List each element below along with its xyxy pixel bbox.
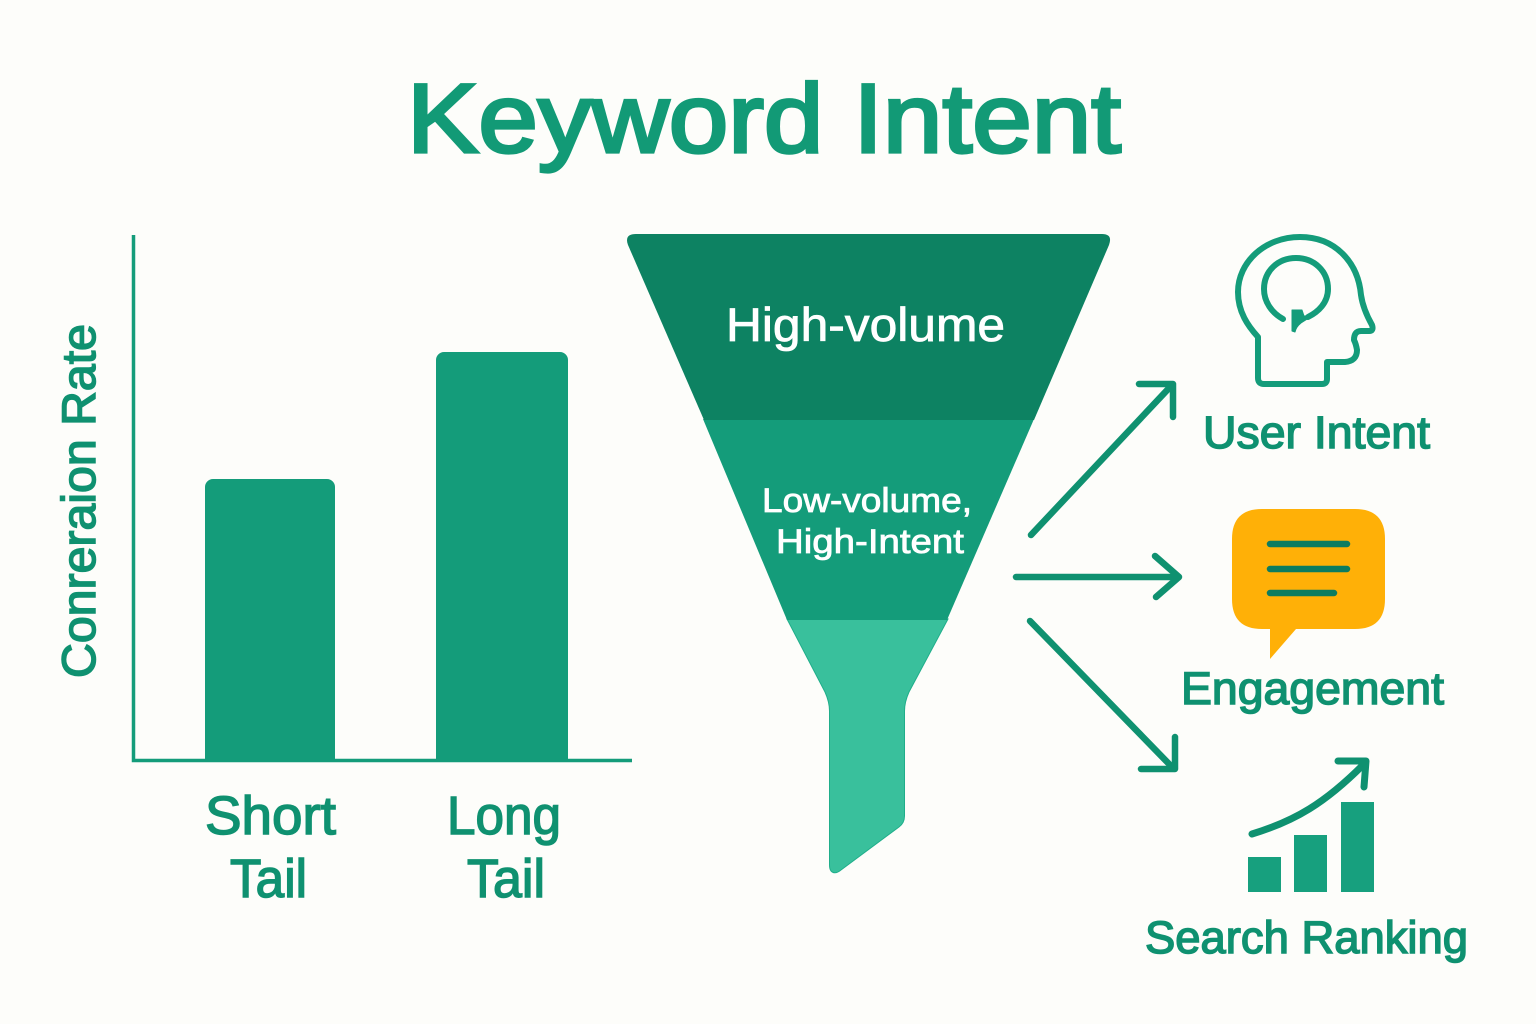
icon: head with circular arrow	[1238, 237, 1373, 384]
bar: short tail	[205, 479, 335, 759]
funnel spout	[787, 619, 948, 873]
label: long tail: Long	[447, 786, 561, 846]
label: low-volume: Low-volume,	[762, 482, 972, 520]
arrow: to user intent	[1031, 384, 1173, 535]
funnel top band	[627, 234, 1110, 420]
funnel	[627, 234, 1110, 873]
bar: long tail	[436, 352, 568, 759]
label: search ranking: Search Ranking	[1145, 912, 1468, 963]
title: Keyword Intent	[407, 64, 1121, 173]
chart axes	[134, 235, 632, 760]
label: user intent: User Intent	[1203, 407, 1431, 458]
bar chart	[52, 235, 632, 909]
label: high-intent: High-Intent	[776, 523, 965, 561]
label: high-volume: High-volume	[726, 298, 1005, 351]
label: long tail second line: Tail	[467, 849, 545, 909]
icon: speech bubble	[1232, 509, 1385, 659]
label: short tail: Short	[205, 786, 336, 846]
label: short tail second line: Tail	[230, 849, 307, 909]
arrow: to search ranking	[1030, 621, 1175, 769]
funnel middle band	[703, 419, 1034, 620]
label: engagement: Engagement	[1181, 663, 1444, 714]
y-axis label: Conreraion Rate	[52, 324, 105, 678]
icon: rising bar chart	[1248, 761, 1374, 892]
arrow: to engagement	[1016, 556, 1179, 597]
